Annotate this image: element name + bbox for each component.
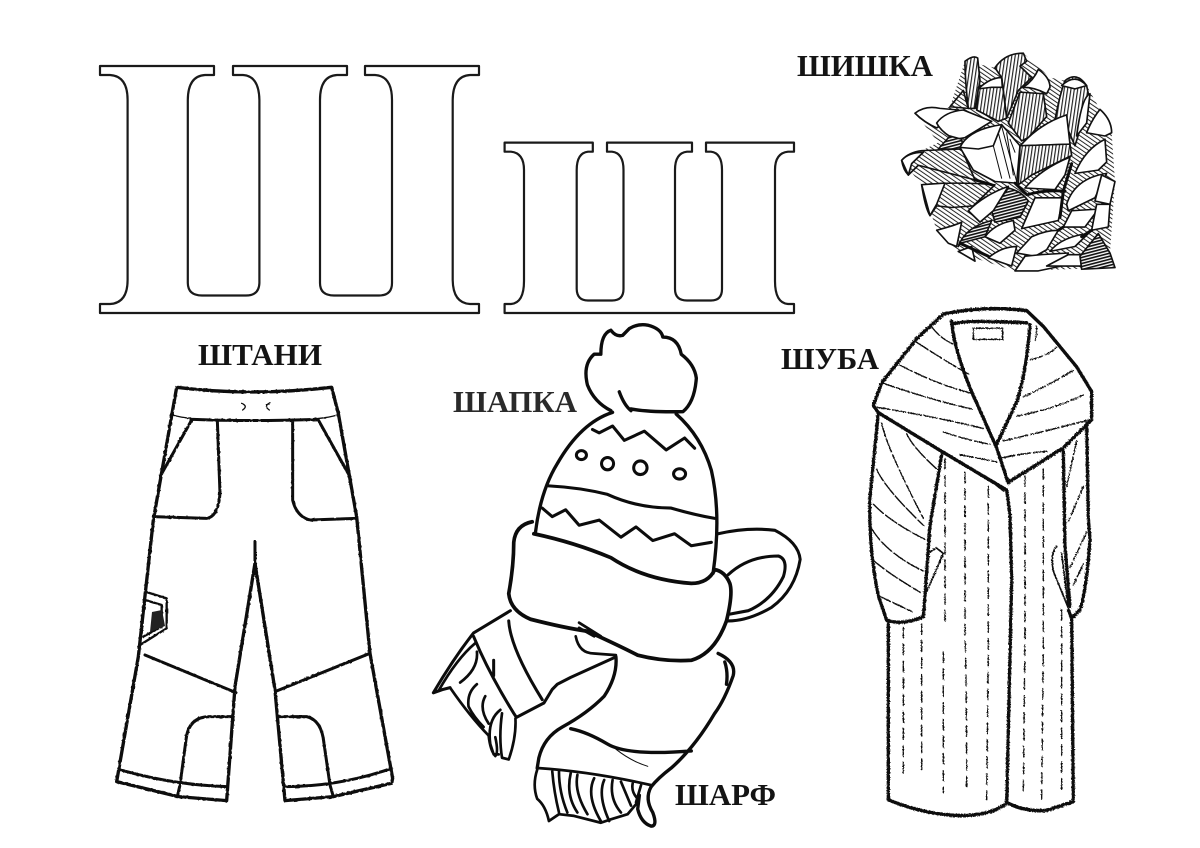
scarf left fringe — [438, 643, 516, 759]
neck label — [973, 328, 1003, 339]
icon: trousers — [117, 387, 393, 801]
collar — [873, 309, 1092, 515]
scarf cuff — [509, 522, 731, 661]
label: ШАРФ: ШАРФ — [675, 777, 776, 812]
pocket badge shading — [150, 610, 165, 632]
hands and pockets — [925, 546, 1068, 608]
body — [888, 515, 1073, 816]
fringe tail — [638, 787, 655, 826]
collar and sleeve fur stripes — [872, 325, 1090, 612]
trouser outline — [117, 387, 393, 801]
pompom — [586, 325, 696, 412]
hat dome — [536, 412, 717, 573]
scarf right loop — [718, 529, 800, 621]
label: ШУБА: ШУБА — [781, 341, 880, 376]
vertical fur seams — [903, 458, 1062, 800]
side patch pocket — [140, 592, 167, 645]
icon: pine cone — [902, 53, 1115, 271]
scarf left end — [433, 611, 616, 717]
lower scarf group — [433, 611, 734, 826]
scarf fold crease — [616, 749, 648, 766]
icon: fur coat — [870, 309, 1092, 816]
trouser seams and pockets — [121, 419, 392, 797]
label: ШАПКА: ШАПКА — [453, 384, 578, 419]
sleeves — [870, 413, 1090, 622]
label: ШТАНИ: ШТАНИ — [198, 337, 322, 372]
scarf lower fringe — [535, 768, 651, 823]
label: ШИШКА: ШИШКА — [797, 48, 934, 83]
capital letter Ш outline — [100, 66, 479, 313]
icon: hat and scarf — [433, 325, 800, 826]
lowercase letter ш outline — [505, 143, 794, 313]
scarf lower end — [537, 653, 734, 787]
hat dots — [576, 451, 686, 479]
waistband line and buttons — [173, 403, 337, 419]
cuff slit — [576, 623, 616, 655]
hat pattern — [542, 426, 715, 546]
